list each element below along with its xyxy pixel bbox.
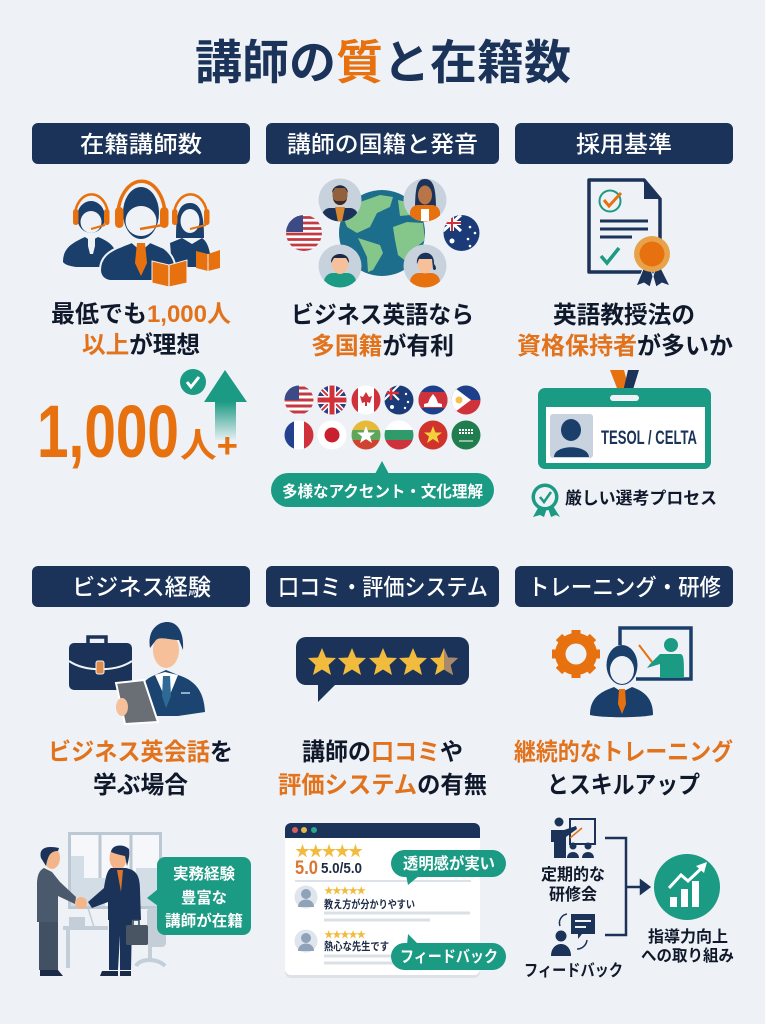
text: minimum count: 最低でも1,000人 [51,301,231,328]
title: 講師の質と在籍数 [195,36,571,89]
review 2 [294,930,395,963]
callout: practical experience: 実務経験 [173,865,235,883]
icon: growth chart circle [654,854,720,920]
flags grid [284,385,481,450]
arrow: bracket to improvement [605,838,649,935]
text: feedback: フィードバック [524,961,623,980]
big number: 1,000人+: 人+ [180,427,238,465]
text: qualification holders: 資格保持者が多いか [517,332,733,360]
icon: instructors with headsets and books [63,181,220,287]
header: 講師の国籍と発音: 講師の国籍と発音 [287,131,478,157]
text: strict selection: 厳しい選考プロセス [565,488,717,508]
text: reviews: 評価システムの有無 [278,772,487,799]
icon: ID card TESOL / CELTA: TESOL / CELTA [601,428,697,449]
callout: transparency [391,850,506,885]
text: multinational: 多国籍が有利 [311,332,454,360]
header: 採用基準 [515,123,733,164]
header: 口コミ・評価システム: 口コミ・評価システム [278,574,488,600]
text: multinational: ビジネス英語なら [291,302,474,329]
icon: globe with people and flags [286,178,480,293]
review 1 [294,886,470,920]
text: improvement efforts: 指導力向上 [648,927,728,946]
icon: regular workshop [551,818,595,858]
callout: diverse accents: 多様なアクセント・文化理解 [282,482,483,501]
callout: transparency: 透明感が実い [403,854,495,873]
callout: diverse accents [271,461,494,507]
review stars and score: 5.0/5.0 [321,860,362,877]
text: qualification holders [517,302,733,360]
text: business english: ビジネス英会話を [48,739,233,766]
icon: up arrow with check [180,369,247,440]
text: reviews: 講師の口コミや [302,739,463,766]
header: ビジネス経験: ビジネス経験 [72,574,211,600]
icon: star rating speech bubble [296,637,469,702]
text: continuous training: 継続的なトレーニング [514,738,733,766]
text: regular workshop: 研修会 [549,885,597,904]
header: 口コミ・評価システム [266,566,499,607]
header: 在籍講師数 [32,123,250,164]
text: minimum count: 以上が理想 [82,331,200,359]
icon: feedback [551,914,595,956]
text: reviews [278,739,487,799]
text: regular workshop [541,865,605,904]
text: business english [48,739,233,799]
header: トレーニング・研修 [515,566,733,607]
icon: training gear and presenter [552,628,691,717]
text: continuous training: とスキルアップ [547,772,700,799]
big number: 1,000人+: 1,000 [37,390,179,473]
header: トレーニング・研修: トレーニング・研修 [528,574,721,600]
callout: practical experience: 豊富な [181,888,227,907]
header: 講師の国籍と発音 [266,123,499,164]
review 1: 教え方が分かりやすい [324,897,415,911]
text: regular workshop: 定期的な [541,865,605,884]
text: multinational [291,302,474,360]
icon: briefcase and business person [69,622,205,724]
text: qualification holders: 英語教授法の [553,302,695,329]
review stars and score: 5.0 [295,858,318,879]
illustration: handshake in office [37,833,166,976]
header: 採用基準: 採用基準 [576,131,672,157]
text: improvement efforts: への取り組み [641,947,734,965]
callout: feedback: フィードバック [400,948,498,966]
icon: selection badge [532,484,560,517]
callout: practical experience: 講師が在籍 [165,911,243,930]
icon: ID card TESOL / CELTA [538,370,711,469]
text: business english: 学ぶ場合 [93,772,188,799]
header: ビジネス経験 [32,566,250,607]
review 2: 熱心な先生です [324,939,389,953]
text: minimum count [51,301,231,359]
review stars and score [295,843,363,879]
icon: certificate with medal [589,180,670,287]
text: continuous training [514,738,733,799]
text: improvement efforts [641,927,734,965]
review stars and score: ★★★★★ [295,843,363,860]
review 2: ★★★★★ [324,930,366,941]
header: 在籍講師数: 在籍講師数 [80,131,202,157]
review 1: ★★★★★ [324,886,366,897]
panel: review card [285,823,480,978]
callout: practical experience [147,857,251,935]
callout: feedback [391,934,506,970]
